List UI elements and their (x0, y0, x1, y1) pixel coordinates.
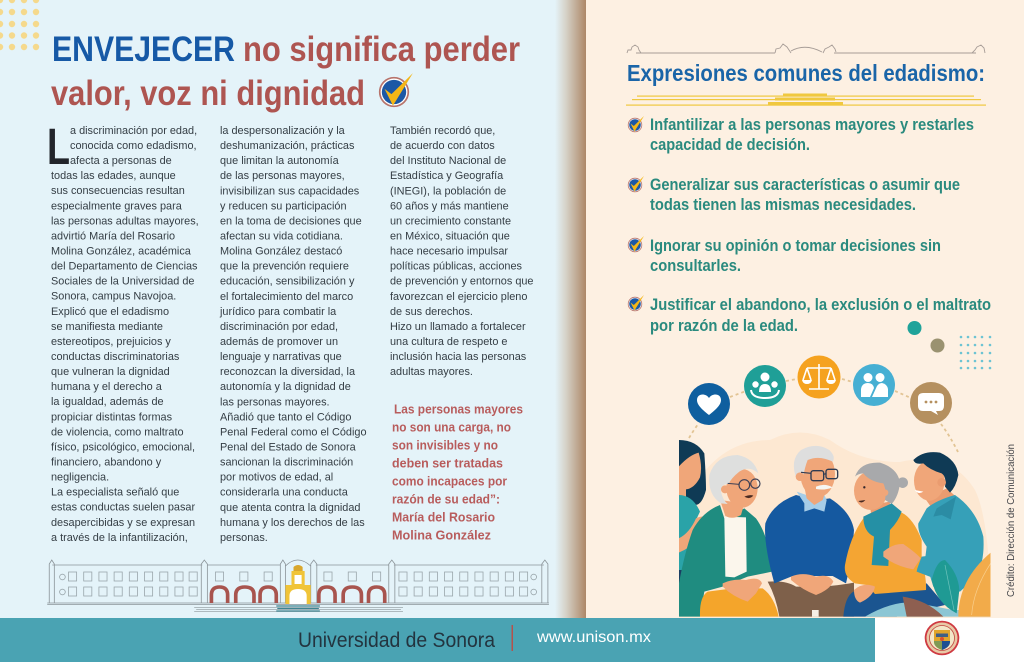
article column 1: que vulneran la dignidad (51, 366, 170, 378)
icon: scales of justice (798, 356, 840, 398)
article column 2: personas. (220, 532, 268, 544)
article column 1: Sociales de la Universidad de (51, 276, 194, 288)
article column 1 (47, 118, 199, 544)
person: older woman (679, 455, 779, 617)
list item 4: por razón de la edad. (650, 316, 798, 335)
article column 1: se manifiesta mediante (51, 321, 163, 333)
list item 2: todas tienen las mismas necesidades. (650, 195, 916, 214)
article column 1: a discriminación por edad, (70, 125, 197, 137)
article column 1: del Departamento de Ciencias (51, 261, 198, 273)
article column 3: de prevención y entornos que (390, 276, 534, 288)
article column 2: y reducen su participación (220, 200, 347, 212)
footer bar (0, 618, 875, 662)
footer divider (512, 625, 513, 651)
article column 3: Hizo un llamado a fortalecer (390, 321, 526, 333)
ornament: top line (627, 44, 985, 53)
article column 1: de violencia, como maltrato (51, 426, 184, 438)
article column 1: a través de la infantilización, (51, 532, 188, 544)
person: young woman at left (679, 440, 706, 583)
article column 2: las personas mayores. (220, 396, 330, 408)
article column 1: estas conductas suelen pasar (51, 502, 195, 514)
article column 2: en la toma de decisiones que (220, 215, 362, 227)
title: ENVEJECER (52, 30, 235, 69)
article column 3: en México, situación que (390, 230, 510, 242)
article column 2: autonomía y la dignidad de (220, 381, 351, 393)
list item 3 (628, 236, 941, 275)
article column 1: humana y el derecho a (51, 381, 163, 393)
pull quote: razón de su edad”: (392, 492, 500, 506)
article column 2: que atenta contra la dignidad (220, 502, 360, 514)
article column 2: sancionan la discriminación (220, 457, 353, 469)
article column 1: conocida como edadismo, (70, 140, 197, 152)
pull quote: no son una carga, no (392, 420, 511, 434)
ornament: gold steps (626, 94, 986, 106)
article column 1: Explicó que el edadismo (51, 306, 169, 318)
article column 2: el fortalecimiento del marco (220, 291, 353, 303)
icon: title check mark (380, 73, 413, 106)
article column 2: la despersonalización y la (220, 125, 346, 137)
left group of people (679, 440, 854, 617)
article column 1: sus consecuencias resultan (51, 185, 185, 197)
article column 2: Molina González destacó (220, 246, 342, 258)
person: young man (913, 452, 984, 592)
footer white box (875, 618, 1024, 662)
list item 3: consultarles. (650, 256, 741, 275)
article column 3: favorezcan el ejercicio pleno (390, 291, 527, 303)
article column 1: desapercibidas y se expresan (51, 517, 195, 529)
article column 2: por motivos de edad, al (220, 472, 333, 484)
article column 2: deshumanización, prácticas (220, 140, 355, 152)
title: valor, voz ni dignidad (51, 74, 365, 113)
decorative dots top left (0, 0, 39, 50)
article column 2: lenguaje y narrativas que (220, 351, 342, 363)
article column 3: un crecimiento constante (390, 215, 511, 227)
list item 1: Infantilizar a las personas mayores y restarles (650, 115, 974, 134)
article column 3: inclusión hacia las personas (390, 351, 527, 363)
young man's arm and hand (883, 544, 930, 577)
icon: community care (744, 365, 786, 407)
article column 2: humana y los derechos de las (220, 517, 365, 529)
background blob (679, 432, 991, 618)
pull quote: María del Rosario (392, 510, 495, 524)
right group of people (843, 452, 991, 617)
pull quote: deben ser tratadas (392, 456, 503, 470)
icon: university seal (925, 621, 959, 655)
building illustration (47, 560, 549, 612)
article column 1: financiero, abandono y (51, 457, 162, 469)
article column 1: propiciar distintas formas (51, 411, 173, 423)
article column 3: 60 años y más mantiene (390, 200, 509, 212)
article column 3: También recordó que, (390, 125, 495, 137)
article column 1: Molina González, académica (51, 246, 192, 258)
person: older woman with scarf (843, 463, 945, 617)
list item 2: Generalizar sus características o asumir que (650, 175, 960, 194)
dashed arc connecting icons (689, 379, 958, 452)
article column 2: considerarla una conducta (220, 487, 349, 499)
drop cap: L (47, 118, 70, 175)
article column 1: negligencia. (51, 472, 109, 484)
decorative circles and dot grid (908, 321, 991, 369)
pull quote (392, 402, 523, 542)
article column 1: estereotipos, prejuicios y (51, 336, 171, 348)
title: no significa perder (243, 30, 520, 69)
illustration: group of people (679, 432, 991, 618)
credit: Crédito: Dirección de Comunicación (1006, 444, 1017, 597)
pull quote: como incapaces por (392, 474, 507, 488)
list item 3: Ignorar su opinión o tomar decisiones sin (650, 236, 941, 255)
pull quote: Molina González (392, 528, 491, 542)
heading: right panel: Expresiones comunes del edadismo: (627, 60, 985, 86)
leaves (865, 553, 991, 617)
article column 3: políticas públicas, acciones (390, 261, 523, 273)
article column 2: educación, sensibilización y (220, 276, 355, 288)
article column 1: físico, psicológico, emocional, (51, 441, 195, 453)
icon: speech bubble (910, 382, 952, 424)
article column 2: discriminación por edad, (220, 321, 338, 333)
list item 1 (628, 115, 974, 154)
article column 2: de las personas mayores, (220, 170, 345, 182)
article column 3: Estadística y Geografía (390, 170, 504, 182)
list item 2 (628, 175, 960, 214)
article column 1: afecta a personas de (70, 155, 172, 167)
article column 1: advirtió María del Rosario (51, 230, 175, 242)
list item 4 (628, 295, 991, 335)
article column 3: hace necesario impulsar (390, 246, 508, 258)
pull quote: Las personas mayores (394, 402, 523, 416)
person: older man (765, 446, 854, 617)
icon: two people (853, 364, 895, 406)
article column 3: de acuerdo con datos (390, 140, 495, 152)
article column 2: Penal del Estado de Sonora (220, 441, 357, 453)
article column 2: Penal Federal como el Código (220, 426, 367, 438)
article column 1: Sonora, campus Navojoa. (51, 291, 176, 303)
article column 1: conductas discriminatorias (51, 351, 180, 363)
pull quote: son invisibles y no (392, 438, 498, 452)
article column 1: las personas adultas mayores, (51, 215, 199, 227)
article column 2: afectan su vida cotidiana. (220, 230, 343, 242)
article column 2: jurídico para combatir la (219, 306, 337, 318)
article column 2: que la prevención requiere (220, 261, 349, 273)
article column 1: especialmente graves para (51, 200, 183, 212)
article column 1: la igualdad, además de (51, 396, 164, 408)
list item 1: capacidad de decisión. (650, 135, 810, 154)
article column 2: que limitan la autonomía (220, 155, 340, 167)
background: fold shadow (555, 0, 586, 662)
icon: heart (688, 383, 730, 425)
article column 2: invisibilizan sus capacidades (220, 185, 360, 197)
article column 2: además de promover un (220, 336, 338, 348)
article column 2: Añadió que tanto el Código (220, 411, 351, 423)
article column 3: del Instituto Nacional de (390, 155, 506, 167)
article column 3: (INEGI), la población de (390, 185, 506, 197)
article column 1: todas las edades, aunque (51, 170, 176, 182)
article column 1: La especialista señaló que (51, 487, 179, 499)
background: right panel (586, 0, 1024, 662)
article column 3: de sus derechos. (390, 306, 473, 318)
background: left panel (0, 0, 556, 662)
article column 3: adultas mayores. (390, 366, 473, 378)
article column 3: una cultura de respeto e (390, 336, 507, 348)
footer: website: www.unison.mx (536, 629, 651, 646)
article column 2: reconozcan la diversidad, la (220, 366, 356, 378)
title (51, 30, 520, 113)
footer: university name: Universidad de Sonora (298, 629, 495, 652)
